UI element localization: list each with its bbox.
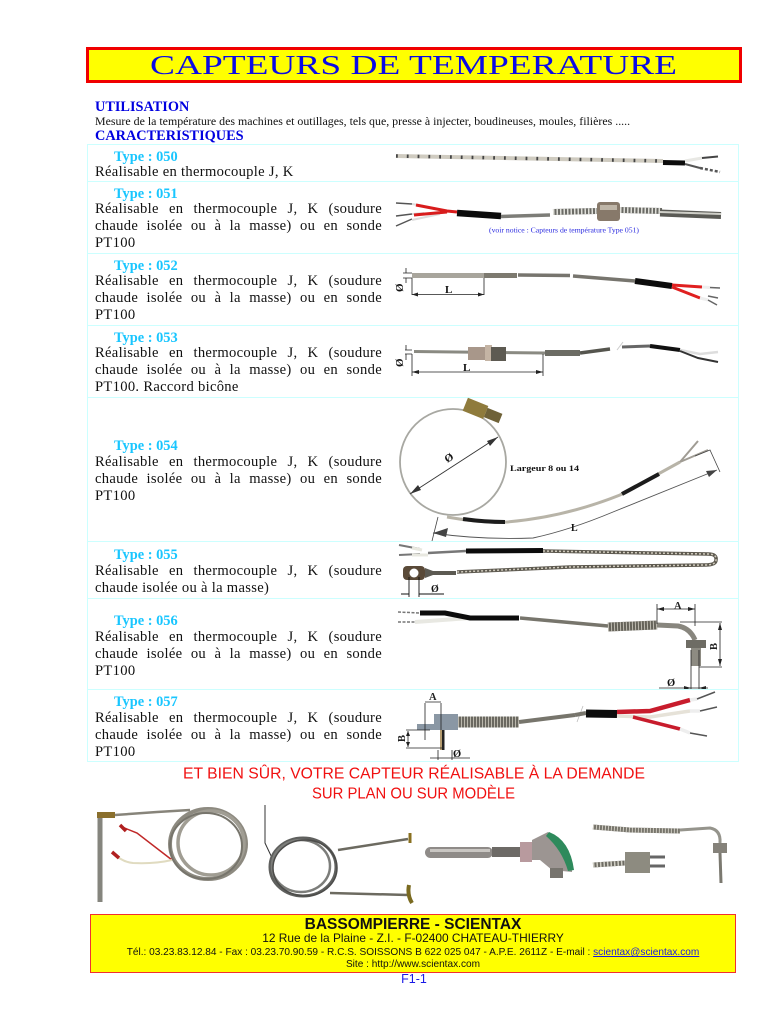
- panel: type 051: [87, 181, 739, 254]
- type 052 description: chaude isolée ou à la masse) ou en sonde: [95, 290, 382, 306]
- heading: caracteristiques: CARACTERISTIQUES: [95, 128, 244, 144]
- photo strip: custom sensors: [97, 805, 727, 904]
- type 056 description: chaude isolée ou à la masse) ou en sonde: [95, 646, 382, 662]
- panel: type 056: [87, 598, 739, 690]
- type 052 description: Réalisable en thermocouple J, K (soudure: [95, 273, 382, 289]
- website: Site : http://www.scientax.com: [346, 959, 480, 970]
- type 055 label: Type : 055: [114, 547, 178, 563]
- icon: type 054 clamp probe with dimensions: Largeur 8 ou 14: [510, 463, 580, 473]
- callout: custom sensors on demand: SUR PLAN OU SUR MODÈLE: [312, 784, 515, 802]
- icon: type 056 angled probe with dimensions: B: [709, 643, 720, 650]
- type 056 description: PT100: [95, 663, 135, 679]
- icon: type 053 threaded probe with dimensions: Ø: [394, 358, 406, 367]
- type 054 description: PT100: [95, 488, 135, 504]
- panel: type 052: [87, 253, 739, 326]
- type 057 label: Type : 057: [114, 694, 178, 710]
- type 054 label: Type : 054: [114, 438, 178, 454]
- type 055 description: Réalisable en thermocouple J, K (soudure: [95, 563, 382, 579]
- heading: utilisation: UTILISATION: [95, 99, 189, 115]
- photo: angled probe with plug: [593, 827, 727, 883]
- footer: company contact box: [90, 914, 736, 973]
- type 054 description: chaude isolée ou à la masse) ou en sonde: [95, 471, 382, 487]
- type 053 description: PT100. Raccord bicône: [95, 379, 239, 395]
- type 051 description: chaude isolée ou à la masse) ou en sonde: [95, 218, 382, 234]
- callout: custom sensors on demand: ET BIEN SÛR, VOTRE CAPTEUR RÉALISABLE À LA DEMANDE: [183, 764, 645, 782]
- type 051 label: Type : 051: [114, 186, 178, 202]
- callout: custom sensors on demand: [183, 764, 645, 802]
- type 056 label: Type : 056: [114, 613, 178, 629]
- usage description: Mesure de la température des machines et outillages, tels que, presse à injecter, boudineuses, moules, filières .....: [95, 114, 630, 128]
- company name: BASSOMPIERRE - SCIENTAX: [305, 916, 521, 933]
- type 057 description: chaude isolée ou à la masse) ou en sonde: [95, 727, 382, 743]
- icon: type 057 bayonet probe with dimensions: Ø: [453, 749, 461, 760]
- type 057 description: [95, 710, 382, 760]
- icon: type 056 angled probe with dimensions: A: [674, 601, 682, 612]
- type 055 description: chaude isolée ou à la masse): [95, 580, 269, 596]
- type 055 description: [95, 563, 382, 596]
- caption: voir notice: (voir notice : Capteurs de température Type 051): [489, 226, 640, 234]
- icon: type 055 ring-lug probe: Ø: [431, 584, 439, 595]
- panel: type 050: [87, 144, 739, 182]
- type 050 label: Type : 050: [114, 149, 178, 165]
- icon: type 057 bayonet probe with dimensions: A: [429, 692, 437, 703]
- icon: type 050 braided cable: [396, 156, 720, 172]
- photo: probe with connection head: [425, 832, 574, 878]
- type 053 description: chaude isolée ou à la masse) ou en sonde: [95, 362, 382, 378]
- type 057 description: Réalisable en thermocouple J, K (soudure: [95, 710, 382, 726]
- type 051 description: PT100: [95, 235, 135, 251]
- icon: type 057 bayonet probe with dimensions: [397, 692, 717, 760]
- icon: type 054 clamp probe with dimensions: [400, 398, 720, 541]
- panel: type 053: [87, 325, 739, 398]
- icon: type 056 angled probe with dimensions: Ø: [667, 678, 675, 689]
- icon: type 055 ring-lug probe: [399, 545, 716, 597]
- icon: type 054 clamp probe with dimensions: Ø: [442, 451, 456, 466]
- type 052 label: Type : 052: [114, 258, 178, 274]
- panel: type 057: [87, 689, 739, 762]
- icon: type 052 probe with dimensions: [394, 268, 720, 305]
- address: 12 Rue de la Plaine - Z.I. - F-02400 CHATEAU-THIERRY: [262, 931, 564, 945]
- page number: F1-1: [401, 972, 427, 986]
- type 054 description: [95, 454, 382, 504]
- icon: type 052 probe with dimensions: Ø: [394, 283, 406, 292]
- type 057 description: PT100: [95, 744, 135, 760]
- photo: coiled cartridge probe: [97, 809, 246, 902]
- icon: type 054 clamp probe with dimensions: L: [571, 523, 578, 534]
- type 052 description: PT100: [95, 307, 135, 323]
- type 053 description: Réalisable en thermocouple J, K (soudure: [95, 345, 382, 361]
- type 054 description: Réalisable en thermocouple J, K (soudure: [95, 454, 382, 470]
- panel: type 054: [87, 397, 739, 542]
- type 050 description: Réalisable en thermocouple J, K: [95, 164, 294, 180]
- type 052 description: [95, 273, 382, 323]
- type 051 description: Réalisable en thermocouple J, K (soudure: [95, 201, 382, 217]
- icon: type 056 angled probe with dimensions: [398, 601, 722, 690]
- type 053 description: [95, 345, 382, 395]
- panel: type 055: [87, 541, 739, 599]
- type 051 description: [95, 201, 382, 251]
- title banner: [86, 47, 742, 83]
- type 056 description: [95, 629, 382, 679]
- type 053 label: Type : 053: [114, 330, 178, 346]
- icon: type 052 probe with dimensions: L: [445, 284, 452, 296]
- phone and registration: Tél.: 03.23.83.12.84 - Fax : 03.23.70.90.59 - R.C.S. SOISSONS B 622 025 047 - A.P.E. 2611Z - E-mail : scientax@scientax.com: [127, 947, 699, 958]
- type 056 description: Réalisable en thermocouple J, K (soudure: [95, 629, 382, 645]
- title banner: CAPTEURS DE TEMPERATURE: [150, 50, 677, 80]
- icon: type 051 cartridge probe: [396, 202, 721, 226]
- icon: type 057 bayonet probe with dimensions: B: [397, 735, 408, 742]
- photo: coiled cable with spade ends: [265, 805, 412, 903]
- icon: type 053 threaded probe with dimensions: [394, 342, 718, 376]
- icon: type 053 threaded probe with dimensions: L: [463, 362, 470, 374]
